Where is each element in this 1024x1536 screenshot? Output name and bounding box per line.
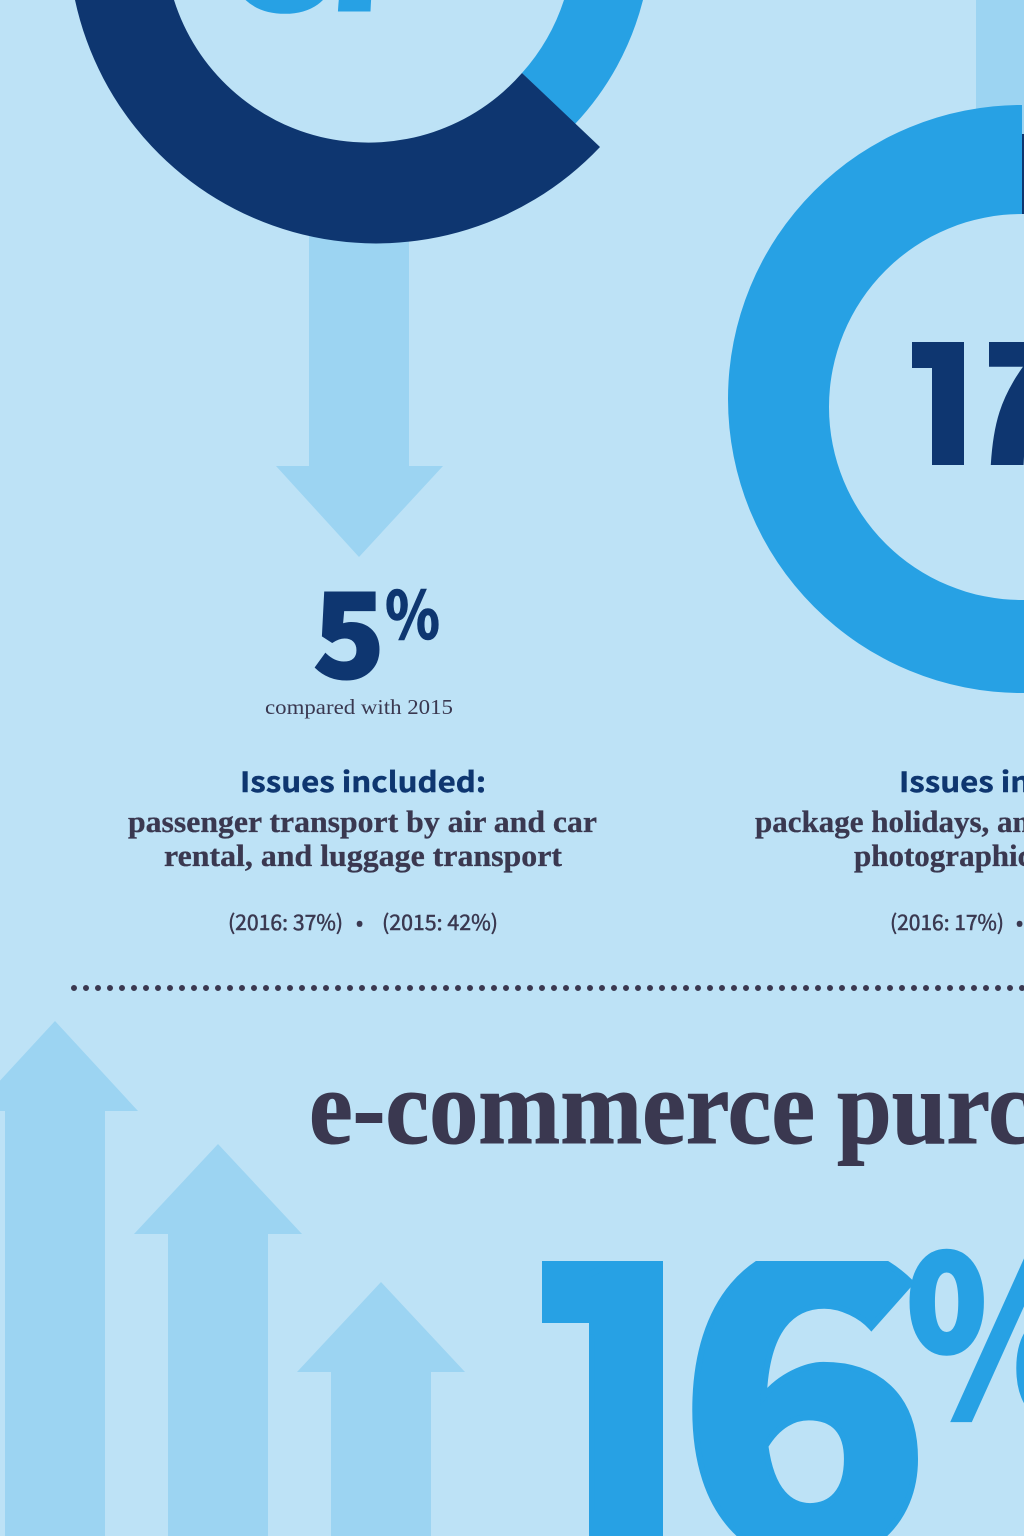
text: yearly comparison <box>228 907 498 937</box>
donut value <box>912 342 1024 465</box>
donut chart: 17 percent <box>728 100 1024 693</box>
donut segment: blue <box>728 105 1024 693</box>
donut segment: navy <box>75 0 600 243</box>
text: yearly comparison: (2015: 42%) <box>382 907 498 937</box>
text: issues list <box>755 804 1024 873</box>
text: issues list: passenger transport by air and car <box>128 804 597 839</box>
arrow: up left <box>0 1021 138 1536</box>
arrow: shaft <box>976 0 1024 120</box>
stat: 5 percent <box>313 541 440 712</box>
caption: compared with 2015: compared with 2015 <box>265 695 453 719</box>
arrow shaft cut at top <box>1022 105 1024 134</box>
arrow: down <box>276 230 443 557</box>
text: issues list <box>128 804 597 873</box>
donut segment: navy <box>1022 134 1024 214</box>
donut value: 1 <box>892 265 997 515</box>
panel: left issue summary <box>75 0 643 937</box>
arrow: up middle <box>134 1144 302 1536</box>
text: yearly comparison: (2016: 37%) <box>228 907 343 937</box>
panel: right issue summary <box>728 0 1024 937</box>
text: yearly comparison: • <box>1016 907 1023 937</box>
arrow: up right <box>297 1282 465 1536</box>
stat: 5 percent: % <box>385 563 440 659</box>
text: yearly comparison <box>892 912 1022 934</box>
heading: e-commerce purchases: e-commerce <box>309 1049 815 1166</box>
text: yearly comparison: (2016: 17%) <box>890 907 1004 937</box>
panel: e-commerce purchases <box>0 1021 1024 1536</box>
stat: 16 percent <box>542 1248 1024 1536</box>
donut chart: 37 percent <box>75 0 643 243</box>
heading: e-commerce purchases <box>312 1092 1024 1166</box>
heading: issues included: Issues included: <box>240 761 486 801</box>
text: issues list: rental, and luggage transport <box>164 838 563 873</box>
donut segment: blue <box>522 0 643 124</box>
stat: 5 percent: 5 <box>313 541 385 712</box>
text: yearly comparison: • <box>356 907 363 937</box>
donut value <box>239 0 410 58</box>
